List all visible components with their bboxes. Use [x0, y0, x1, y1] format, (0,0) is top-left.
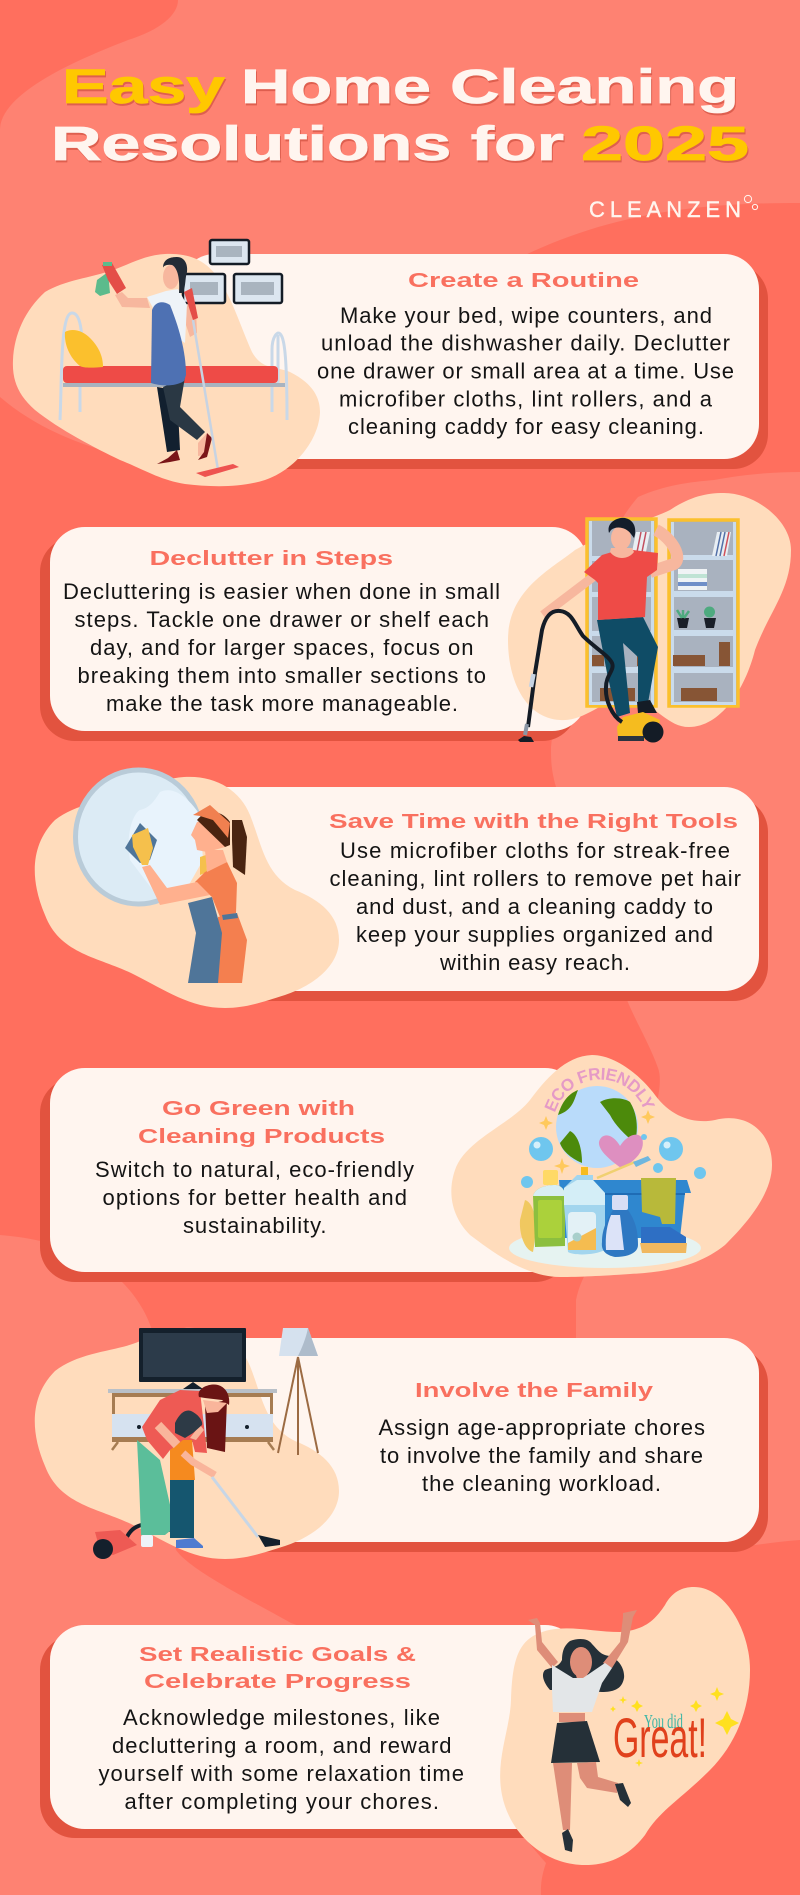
body text: Make your bed, wipe counters, and	[340, 303, 712, 328]
panel: Go Green with Cleaning Products	[40, 1055, 772, 1282]
body text: after completing your chores.	[124, 1789, 439, 1814]
body text: cleaning caddy for easy cleaning.	[348, 414, 704, 439]
title: Easy	[62, 61, 225, 114]
illustration: man vacuuming by shelves	[518, 518, 738, 742]
body text: sustainability.	[183, 1213, 326, 1238]
title: Home Cleaning	[241, 61, 739, 114]
body text: day, and for larger spaces, focus on	[90, 635, 474, 660]
panel: Create a Routine	[13, 240, 768, 486]
body text: decluttering a room, and reward	[112, 1733, 452, 1758]
logo: Cleanzen: CLEANZEN	[589, 197, 741, 222]
body text: Acknowledge milestones, like	[123, 1705, 440, 1730]
body text: make the task more manageable.	[106, 691, 458, 716]
heading: Set Realistic Goals &	[139, 1643, 416, 1666]
heading	[138, 1097, 385, 1148]
illustration: mother and child vacuuming	[93, 1328, 318, 1559]
body text	[98, 1705, 464, 1814]
body text: options for better health and	[102, 1185, 407, 1210]
body text: Switch to natural, eco-friendly	[95, 1157, 414, 1182]
heading: Celebrate Progress	[144, 1670, 411, 1693]
panel: Declutter in Steps	[40, 493, 791, 742]
panel: Involve the Family	[35, 1328, 768, 1559]
body text: steps. Tackle one drawer or shelf each	[74, 607, 489, 632]
title: Easy	[63, 63, 226, 116]
title: 2025	[581, 118, 749, 171]
illustration: celebrating woman	[528, 1610, 739, 1852]
body text: within easy reach.	[439, 950, 630, 975]
heading: Save Time with the Right Tools	[329, 810, 738, 833]
body text: one drawer or small area at a time. Use	[317, 358, 734, 384]
body text: and dust, and a cleaning caddy to	[356, 894, 713, 919]
body text: keep your supplies organized and	[356, 922, 713, 947]
title	[51, 61, 750, 173]
body text: the cleaning workload.	[422, 1471, 661, 1496]
heading: Declutter in Steps	[150, 547, 393, 570]
heading: Go Green with	[162, 1097, 355, 1120]
body text	[95, 1157, 414, 1238]
heading: Involve the Family	[415, 1379, 654, 1402]
illustration: woman wiping mirror	[76, 770, 247, 983]
body text	[63, 579, 500, 716]
badge: You did Great!: You did	[644, 1711, 683, 1733]
heading: Cleaning Products	[138, 1125, 385, 1148]
heading: Create a Routine	[408, 269, 639, 292]
body text: cleaning, lint rollers to remove pet hair	[330, 866, 741, 891]
body text: Decluttering is easier when done in small	[63, 579, 500, 604]
badge: You did Great!: Great!	[613, 1706, 707, 1769]
body text	[330, 838, 741, 975]
title: Resolutions for	[51, 118, 564, 171]
body text	[378, 1415, 705, 1496]
body text	[317, 303, 734, 439]
badge: You did Great!	[610, 1687, 739, 1769]
title: 2025	[582, 120, 750, 173]
body text: yourself with some relaxation time	[98, 1761, 464, 1786]
body text: unload the dishwasher daily. Declutter	[321, 330, 730, 356]
body text: breaking them into smaller sections to	[78, 663, 486, 688]
panel: Set Realistic Goals & Celebrate Progress	[40, 1587, 750, 1865]
body text: to involve the family and share	[380, 1443, 703, 1468]
eco friendly label: ECO FRIENDLY	[544, 1068, 655, 1112]
body text: microfiber cloths, lint rollers, and a	[339, 386, 713, 412]
panel: Save Time with the Right Tools	[35, 770, 768, 1008]
heading	[139, 1643, 416, 1693]
body text: Assign age-appropriate chores	[378, 1415, 705, 1440]
title: Home Cleaning	[242, 63, 740, 116]
illustration: woman cleaning bedroom	[60, 240, 287, 477]
body text: Use microfiber cloths for streak-free	[340, 838, 730, 863]
illustration: eco friendly cleaning products	[509, 1068, 706, 1268]
title: Resolutions for	[52, 120, 565, 173]
